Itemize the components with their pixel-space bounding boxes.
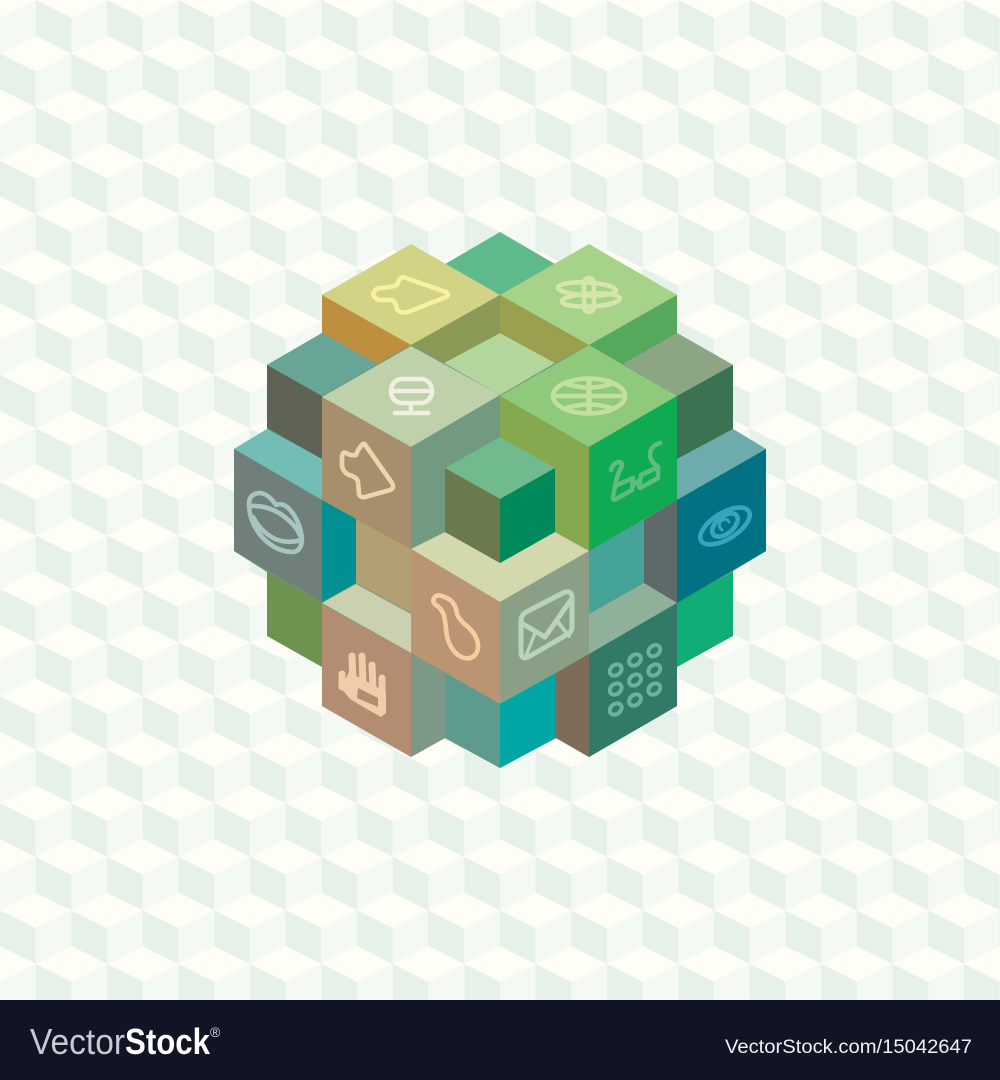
bright green low face bbox=[677, 572, 733, 667]
green side face bbox=[589, 295, 677, 364]
dark teal face with keypad icon bbox=[589, 603, 677, 757]
grey face with lips icon bbox=[234, 449, 322, 602]
isometric cube cluster bbox=[234, 232, 766, 768]
olive green side face bbox=[500, 396, 589, 551]
logo: VectorStock: ® bbox=[210, 1024, 221, 1040]
yellow block top with shape icon bbox=[322, 244, 500, 345]
sage block top with chair icon bbox=[322, 346, 500, 447]
teal top far left bbox=[234, 429, 322, 500]
back top face bbox=[445, 232, 555, 295]
teal low face bbox=[445, 673, 500, 768]
dark grey side face bbox=[267, 365, 322, 459]
peach face with drumstick icon bbox=[411, 549, 500, 704]
light green centre top face bbox=[444, 333, 555, 395]
bright green face with glasses icon bbox=[589, 396, 677, 551]
olive grey face with envelope icon bbox=[500, 551, 589, 704]
logo: VectorStock: Vector bbox=[30, 1021, 125, 1062]
teal top far right bbox=[677, 429, 766, 500]
image id text: VectorStock.com/15042647 bbox=[725, 1037, 972, 1058]
teal top face left bbox=[267, 333, 377, 396]
olive side face right bbox=[500, 295, 589, 363]
orange side face bbox=[322, 294, 411, 364]
icon: hand bbox=[341, 656, 386, 717]
deep teal face with eye icon bbox=[677, 449, 766, 603]
sage side face bbox=[411, 397, 500, 549]
grey-green top face bbox=[623, 333, 733, 396]
pale green top lower right bbox=[589, 583, 677, 654]
brown-pink face with hand icon bbox=[322, 604, 411, 757]
green block top with globe icon bbox=[500, 345, 677, 447]
grey-green narrow face bbox=[411, 653, 445, 757]
tan middle face bbox=[356, 519, 411, 613]
logo: VectorStock bbox=[30, 1021, 221, 1062]
slate face bbox=[644, 500, 677, 603]
pale top face lower left bbox=[322, 584, 411, 653]
logo: VectorStock: Stock bbox=[125, 1021, 211, 1062]
tan face with animal icon bbox=[322, 397, 411, 549]
green low face bbox=[267, 572, 322, 667]
teal mid face bbox=[589, 520, 644, 614]
dark green side face bbox=[677, 365, 733, 459]
small centre cube bbox=[445, 437, 555, 563]
pale beige top face bbox=[411, 532, 589, 602]
brown narrow face bbox=[556, 654, 589, 757]
teal side face bbox=[322, 500, 356, 602]
watermark bar bbox=[0, 1000, 1000, 1080]
olive side face left bbox=[411, 295, 500, 363]
green block top with knot icon bbox=[500, 244, 677, 345]
bright teal low face bbox=[500, 673, 556, 768]
